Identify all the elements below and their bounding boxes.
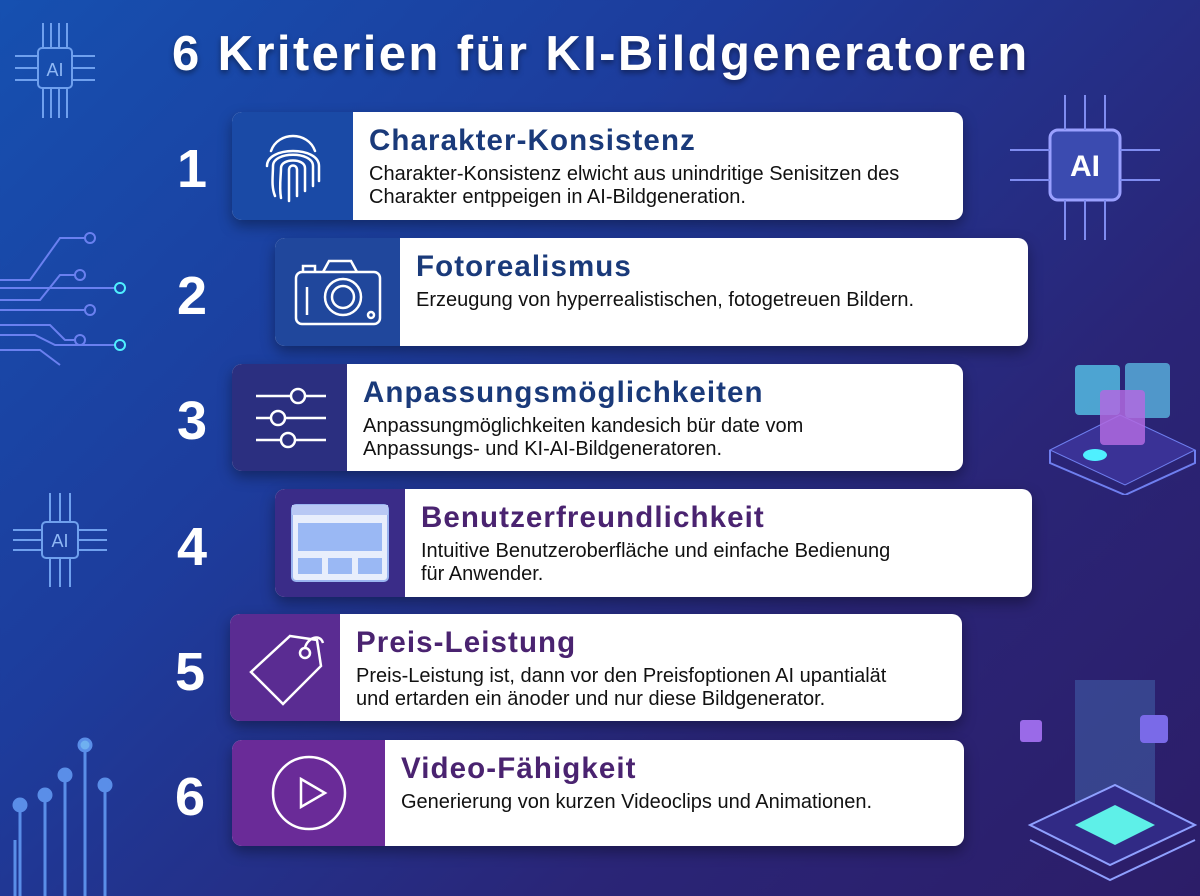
card 6: Video-Fähigkeit	[401, 752, 637, 785]
card 6: Generierung von kurzen Videoclips und Animationen.	[401, 791, 872, 813]
card 3: Anpassungs- und KI-AI-Bildgeneratoren.	[363, 438, 722, 460]
card 5: und ertarden ein änoder und nur diese Bildgenerator.	[356, 688, 825, 710]
icon: sliders	[232, 364, 347, 471]
icon: isometric platform bottom right	[1020, 680, 1198, 882]
card 1	[232, 112, 963, 220]
icon: fingerprint	[232, 112, 353, 220]
icon: camera	[275, 238, 400, 346]
icon: circuit tree bottom left	[12, 738, 112, 896]
number 3: 3	[177, 391, 207, 451]
card 1: Charakter-Konsistenz elwicht aus unindritige Senisitzen des	[369, 163, 899, 185]
icon: AI chip top left: AI	[46, 60, 64, 80]
icon: AI chip left middle	[13, 493, 107, 587]
title: 6 Kriterien für KI-Bildgeneratoren	[172, 27, 1030, 81]
card 2: Fotorealismus	[416, 250, 632, 283]
icon: AI chip top left	[15, 23, 95, 118]
card 3: Anpassungsmöglichkeiten	[363, 376, 764, 409]
icon: AI chip right: AI	[1070, 150, 1100, 183]
card 2: Erzeugung von hyperrealistischen, fotogetreuen Bildern.	[416, 289, 914, 311]
card 1: Charakter-Konsistenz	[369, 124, 696, 157]
number 6: 6	[175, 767, 205, 827]
card 4: für Anwender.	[421, 563, 543, 585]
icon: AI chip left middle: AI	[51, 531, 69, 551]
icon: ui window	[275, 489, 405, 597]
card 4	[275, 489, 1032, 597]
icon: circuit lines left	[0, 232, 126, 366]
card 5: Preis-Leistung ist, dann vor den Preisfoptionen AI upantialät	[356, 665, 886, 687]
number 4: 4	[177, 517, 207, 577]
number 5: 5	[175, 642, 205, 702]
card 5: Preis-Leistung	[356, 626, 576, 659]
icon: play button	[232, 740, 385, 846]
card 6	[232, 740, 964, 846]
icon: price tag	[230, 614, 340, 721]
number 2: 2	[177, 266, 207, 326]
card 1: Charakter entppeigen in AI-Bildgeneration.	[369, 186, 746, 208]
card 4: Intuitive Benutzeroberfläche und einfache Bedienung	[421, 540, 890, 562]
card 4: Benutzerfreundlichkeit	[421, 501, 765, 534]
icon: AI chip right	[1010, 95, 1160, 240]
card 5	[230, 614, 962, 721]
card 3	[232, 364, 963, 471]
icon: isometric screens right	[1049, 363, 1196, 495]
card 2	[275, 238, 1028, 346]
card 3: Anpassungmöglichkeiten kandesich bür date vom	[363, 415, 803, 437]
number 1: 1	[177, 139, 207, 199]
